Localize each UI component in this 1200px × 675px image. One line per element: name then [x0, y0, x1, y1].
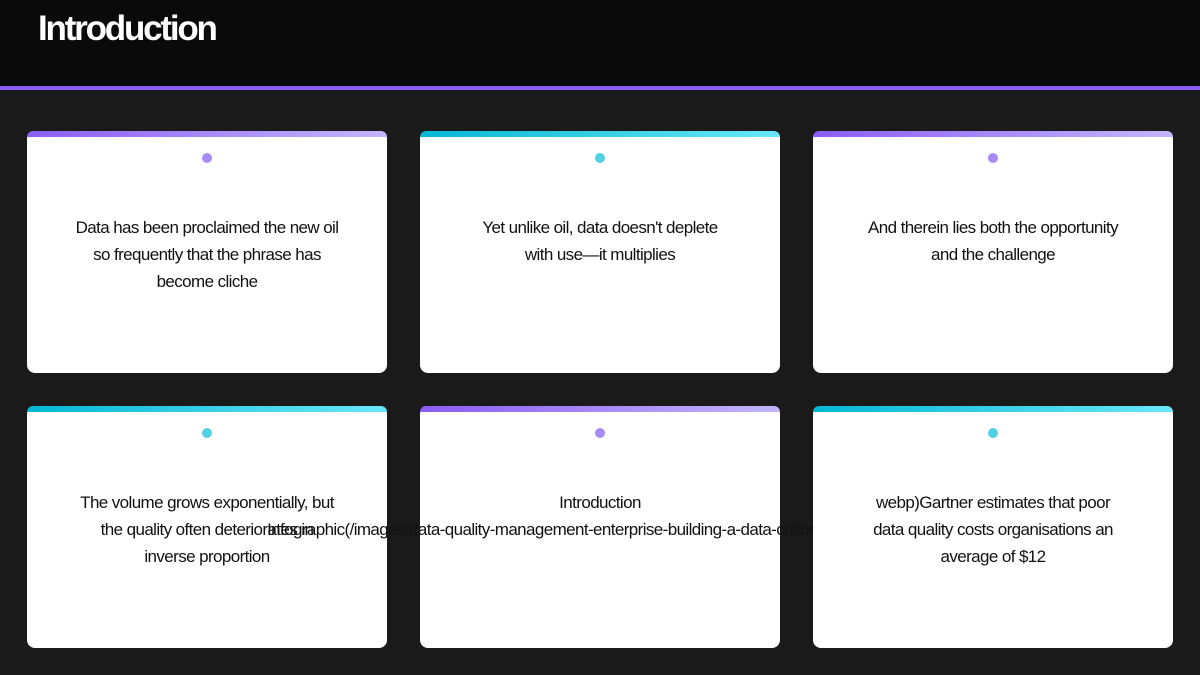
- card 6: webp)Gartner estimates that poor: [876, 493, 1110, 512]
- card 1: Data has been proclaimed the new oil: [76, 218, 338, 237]
- card 1: [27, 131, 387, 373]
- card 6: average of $12: [940, 547, 1046, 566]
- card 4: the quality often deteriorates in: [101, 520, 313, 539]
- card 3: And therein lies both the opportunity: [868, 218, 1118, 237]
- card 2: Yet unlike oil, data doesn't deplete: [482, 218, 718, 237]
- header: [0, 0, 1200, 86]
- card 4: inverse proportion: [144, 547, 270, 566]
- card 5: [420, 406, 780, 648]
- card 4: The volume grows exponentially, but: [80, 493, 334, 512]
- card 2: with use—it multiplies: [525, 245, 675, 264]
- card 4: [27, 406, 387, 648]
- card 3: [813, 131, 1173, 373]
- card 1: so frequently that the phrase has: [93, 245, 321, 264]
- card 6: [813, 406, 1173, 648]
- card 5: Infographic(/images/data-quality-management-enterprise-building-a-data-culture.: [267, 520, 827, 539]
- card 5: Introduction: [559, 493, 641, 512]
- card 6: data quality costs organisations an: [873, 520, 1113, 539]
- card 1: become cliche: [157, 272, 257, 291]
- card 2: [420, 131, 780, 373]
- header: Introduction: [38, 9, 216, 48]
- card 3: and the challenge: [931, 245, 1055, 264]
